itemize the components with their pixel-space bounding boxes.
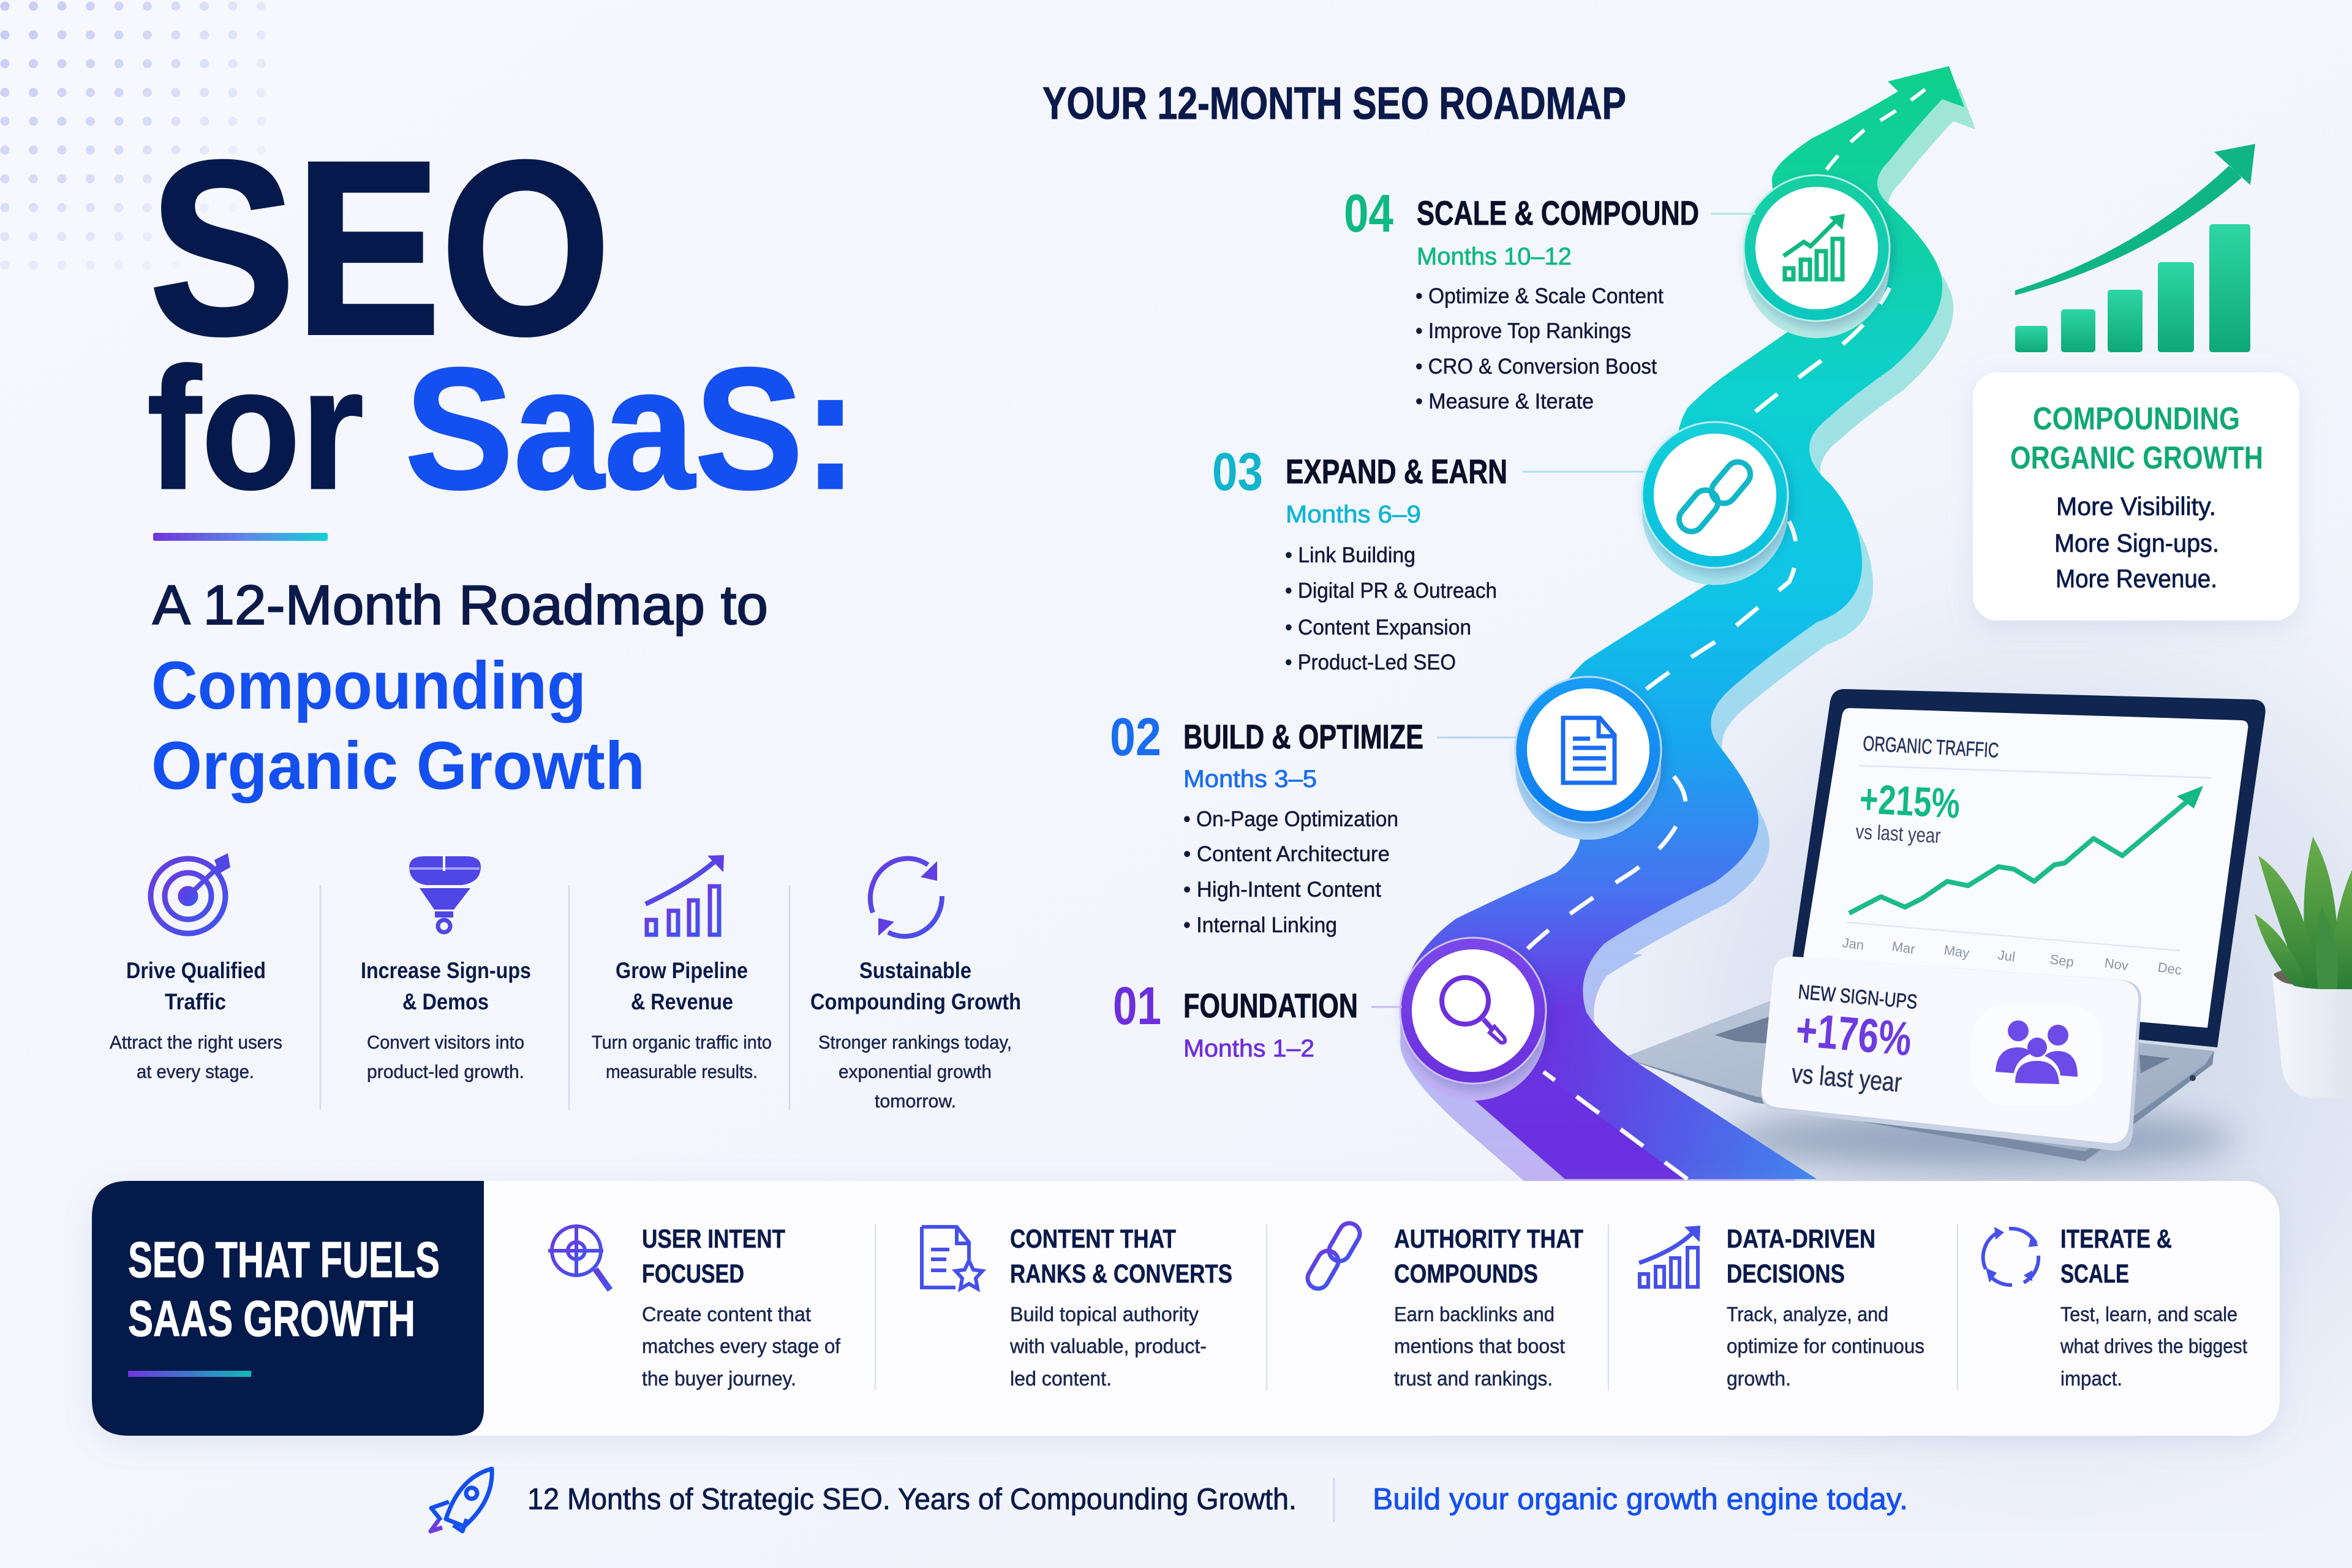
screen line chart: Sep <box>2049 951 2075 970</box>
road lower right tint <box>1531 974 1817 1179</box>
icon: magnifier <box>1442 978 1505 1042</box>
subtitle highlight line one: Compounding <box>151 648 586 723</box>
benefits row <box>110 853 1021 1112</box>
icon: document <box>1563 718 1615 783</box>
pillar: authority: AUTHORITY THAT <box>1394 1224 1583 1254</box>
stage 02 text: • High-Intent Content <box>1183 878 1381 902</box>
pillar: user intent: Create content that <box>642 1303 811 1325</box>
rising arrow <box>2015 144 2255 295</box>
title: SEO: SEO <box>149 110 611 386</box>
pillar: iterate: SCALE <box>2060 1259 2129 1289</box>
benefit: sustainable growth: tomorrow. <box>875 1090 956 1112</box>
pillar: data: Track, analyze, and <box>1727 1303 1888 1325</box>
card label: NEW SIGN-UPS <box>1797 980 1918 1013</box>
icon: funnel <box>409 853 481 932</box>
compounding growth card: ORGANIC GROWTH <box>2010 440 2263 476</box>
compounding growth card: More Sign-ups. <box>2054 529 2219 557</box>
footer call to action: Build your organic growth engine today. <box>1373 1483 1908 1516</box>
benefit: grow pipeline: Grow Pipeline <box>616 958 748 983</box>
roadmap heading: YOUR 12-MONTH SEO ROADMAP <box>1042 78 1626 129</box>
stage 03 text: • Link Building <box>1285 543 1415 567</box>
stage 04 text: • Measure & Iterate <box>1415 390 1594 413</box>
laptop base <box>1623 1001 2214 1161</box>
screen line chart: Dec <box>2157 959 2183 978</box>
pillar: data: optimize for continuous <box>1727 1335 1924 1357</box>
stage 04 marker <box>1744 175 1890 338</box>
pillar: user intent: matches every stage of <box>642 1335 841 1357</box>
pillar: user intent <box>642 1224 841 1390</box>
screen line chart: Jul <box>1997 947 2016 965</box>
pillar: data: DATA-DRIVEN <box>1727 1224 1875 1254</box>
pillar: data: growth. <box>1727 1367 1791 1390</box>
pillar: iterate: Test, learn, and scale <box>2060 1303 2237 1325</box>
pillar: content: RANKS & CONVERTS <box>1010 1259 1232 1289</box>
laptop: vs last year <box>1855 820 1941 848</box>
benefit: increase sign-ups: Increase Sign-ups <box>361 958 531 983</box>
new sign-ups card <box>1762 957 2141 1151</box>
stage 01 marker <box>1400 938 1546 1101</box>
compounding growth card: More Revenue. <box>2056 564 2217 593</box>
stage 03 text: • Digital PR & Outreach <box>1285 579 1497 603</box>
stage 04 text: • Improve Top Rankings <box>1415 319 1631 343</box>
card metric: +176% <box>1794 1002 1913 1066</box>
plant <box>2255 837 2352 1098</box>
road centre dashes <box>1528 89 1925 1179</box>
plant soil <box>2272 967 2352 986</box>
pillar: user intent: the buyer journey. <box>642 1367 796 1390</box>
compounding growth card <box>1973 372 2299 620</box>
laptop shadow <box>1721 1111 2236 1167</box>
footer <box>431 1469 1908 1531</box>
stage 02 text: • On-Page Optimization <box>1183 807 1398 831</box>
icon: link <box>1304 1219 1363 1292</box>
benefit: grow pipeline: Turn organic traffic into <box>592 1031 772 1053</box>
benefit: increase sign-ups <box>361 958 531 1082</box>
title block <box>147 110 858 804</box>
laptop screen <box>1785 689 2266 1047</box>
icon: user intent <box>548 1225 610 1290</box>
pillar: user intent: USER INTENT <box>642 1224 785 1254</box>
pillar: iterate: impact. <box>2060 1367 2122 1390</box>
panel: dark heading box: SEO THAT FUELS <box>128 1231 440 1288</box>
benefit: sustainable growth: Sustainable <box>859 958 971 983</box>
plant pot <box>2272 971 2352 1098</box>
pillar: content: with valuable, product- <box>1009 1335 1207 1357</box>
stage 04 text <box>1344 184 1755 413</box>
decorative dot grid <box>0 1 266 270</box>
stage 03 text: 03 <box>1212 442 1263 502</box>
stage 03 text: EXPAND & EARN <box>1286 452 1507 491</box>
panel: dark heading box <box>92 1181 484 1436</box>
road side walls <box>1400 88 1975 1215</box>
screen line chart: Mar <box>1891 938 1916 957</box>
footer statement: 12 Months of Strategic SEO. Years of Compounding Growth. <box>527 1483 1297 1516</box>
screen line chart: Jan <box>1841 935 1865 953</box>
icon: growth chart <box>646 855 724 935</box>
screen line chart: May <box>1943 942 1970 961</box>
stage 02 text: BUILD & OPTIMIZE <box>1183 717 1423 756</box>
stage 01 text: Months 1–2 <box>1183 1035 1314 1062</box>
plant leaves <box>2255 837 2352 989</box>
screen line chart <box>1841 786 2203 978</box>
benefit: drive traffic <box>110 958 282 1082</box>
stage 04 text: • CRO & Conversion Boost <box>1415 355 1657 379</box>
compounding growth card: More Visibility. <box>2056 492 2216 521</box>
title underline <box>153 533 328 541</box>
stage 02 text: 02 <box>1110 707 1161 767</box>
benefit: sustainable growth: Stronger rankings today, <box>818 1031 1012 1053</box>
pillar: content: Build topical authority <box>1010 1303 1199 1325</box>
compounding growth chart <box>2015 144 2255 352</box>
stage 04 text: SCALE & COMPOUND <box>1417 194 1699 232</box>
title: for: for <box>147 332 364 525</box>
pillar: iterate <box>2060 1224 2247 1390</box>
icon: iterate cycle <box>1983 1227 2038 1285</box>
pillar: iterate: what drives the biggest <box>2060 1335 2247 1357</box>
benefit: grow pipeline <box>592 958 772 1082</box>
benefit: drive traffic: Attract the right users <box>110 1031 282 1053</box>
new sign-ups card: vs last year <box>1790 1058 1903 1098</box>
stage 02 text <box>1110 707 1517 937</box>
stage 03 text: • Content Expansion <box>1285 616 1471 639</box>
road <box>1400 66 1975 1215</box>
screen metric: +215% <box>1858 775 1961 827</box>
icon: data chart <box>1639 1226 1700 1287</box>
icon: cycle arrows <box>870 859 942 937</box>
pillar: authority: Earn backlinks and <box>1394 1303 1555 1325</box>
stage 04 text: • Optimize & Scale Content <box>1415 284 1664 308</box>
stage 01 text: 01 <box>1113 976 1161 1036</box>
icon: content document with star <box>922 1227 982 1289</box>
benefit: drive traffic: Traffic <box>165 989 226 1014</box>
benefit: drive traffic: Drive Qualified <box>126 958 266 983</box>
icon: people <box>1971 1005 2103 1106</box>
icon: rocket <box>431 1469 492 1531</box>
pillar: iterate: ITERATE & <box>2060 1224 2172 1254</box>
stage 02 text: Months 3–5 <box>1183 766 1317 793</box>
pillar: authority <box>1394 1224 1583 1390</box>
subtitle highlight line two: Organic Growth <box>151 728 645 804</box>
pillar: content: led content. <box>1010 1367 1112 1390</box>
stage 02 text: • Content Architecture <box>1183 842 1390 866</box>
benefit: increase sign-ups: & Demos <box>402 989 489 1014</box>
pillar: data <box>1727 1224 1924 1390</box>
pillar: authority: mentions that boost <box>1394 1335 1565 1357</box>
icon: growth bars <box>1784 214 1845 279</box>
stage 01 text: FOUNDATION <box>1183 986 1358 1025</box>
benefit: sustainable growth: Compounding Growth <box>810 989 1021 1014</box>
pillar: content <box>1009 1224 1232 1390</box>
benefit: drive traffic: at every stage. <box>137 1061 254 1082</box>
stage 03 marker <box>1642 422 1788 585</box>
road surface <box>1403 66 1964 1179</box>
stage 03 text: Months 6–9 <box>1286 501 1421 528</box>
benefit: sustainable growth <box>810 958 1021 1112</box>
benefit: increase sign-ups: Convert visitors into <box>367 1031 524 1053</box>
panel: dark heading box: SAAS GROWTH <box>128 1290 415 1347</box>
benefit: grow pipeline: & Revenue <box>631 989 733 1014</box>
laptop <box>1623 689 2266 1167</box>
benefit: sustainable growth: exponential growth <box>839 1061 992 1082</box>
screen chart title: ORGANIC TRAFFIC <box>1863 732 1999 763</box>
pillar: authority: trust and rankings. <box>1394 1367 1553 1390</box>
bars <box>2015 224 2250 352</box>
screen line chart: Nov <box>2103 955 2130 973</box>
benefit: increase sign-ups: product-led growth. <box>367 1061 524 1082</box>
pillar: content: CONTENT THAT <box>1010 1224 1176 1254</box>
icon: chain link <box>1674 457 1755 537</box>
stage 03 text: • Product-Led SEO <box>1285 650 1456 674</box>
icon: target <box>151 853 230 933</box>
stage 03 text <box>1212 442 1643 674</box>
subtitle: A 12-Month Roadmap to <box>153 575 768 636</box>
title: SaaS: SaaS: <box>405 332 858 525</box>
stage 02 marker <box>1515 677 1661 840</box>
stage 04 text: Months 10–12 <box>1417 243 1572 270</box>
stage 02 text: • Internal Linking <box>1183 913 1337 937</box>
bottom panel <box>92 1181 2280 1436</box>
pillar: data: DECISIONS <box>1727 1259 1845 1289</box>
pillar: user intent: FOCUSED <box>642 1259 744 1289</box>
benefit: grow pipeline: measurable results. <box>606 1061 758 1082</box>
pillar: authority: COMPOUNDS <box>1394 1259 1538 1289</box>
stage 01 text <box>1113 976 1402 1062</box>
compounding growth card: COMPOUNDING <box>2033 401 2240 437</box>
stage 04 text: 04 <box>1344 184 1393 243</box>
